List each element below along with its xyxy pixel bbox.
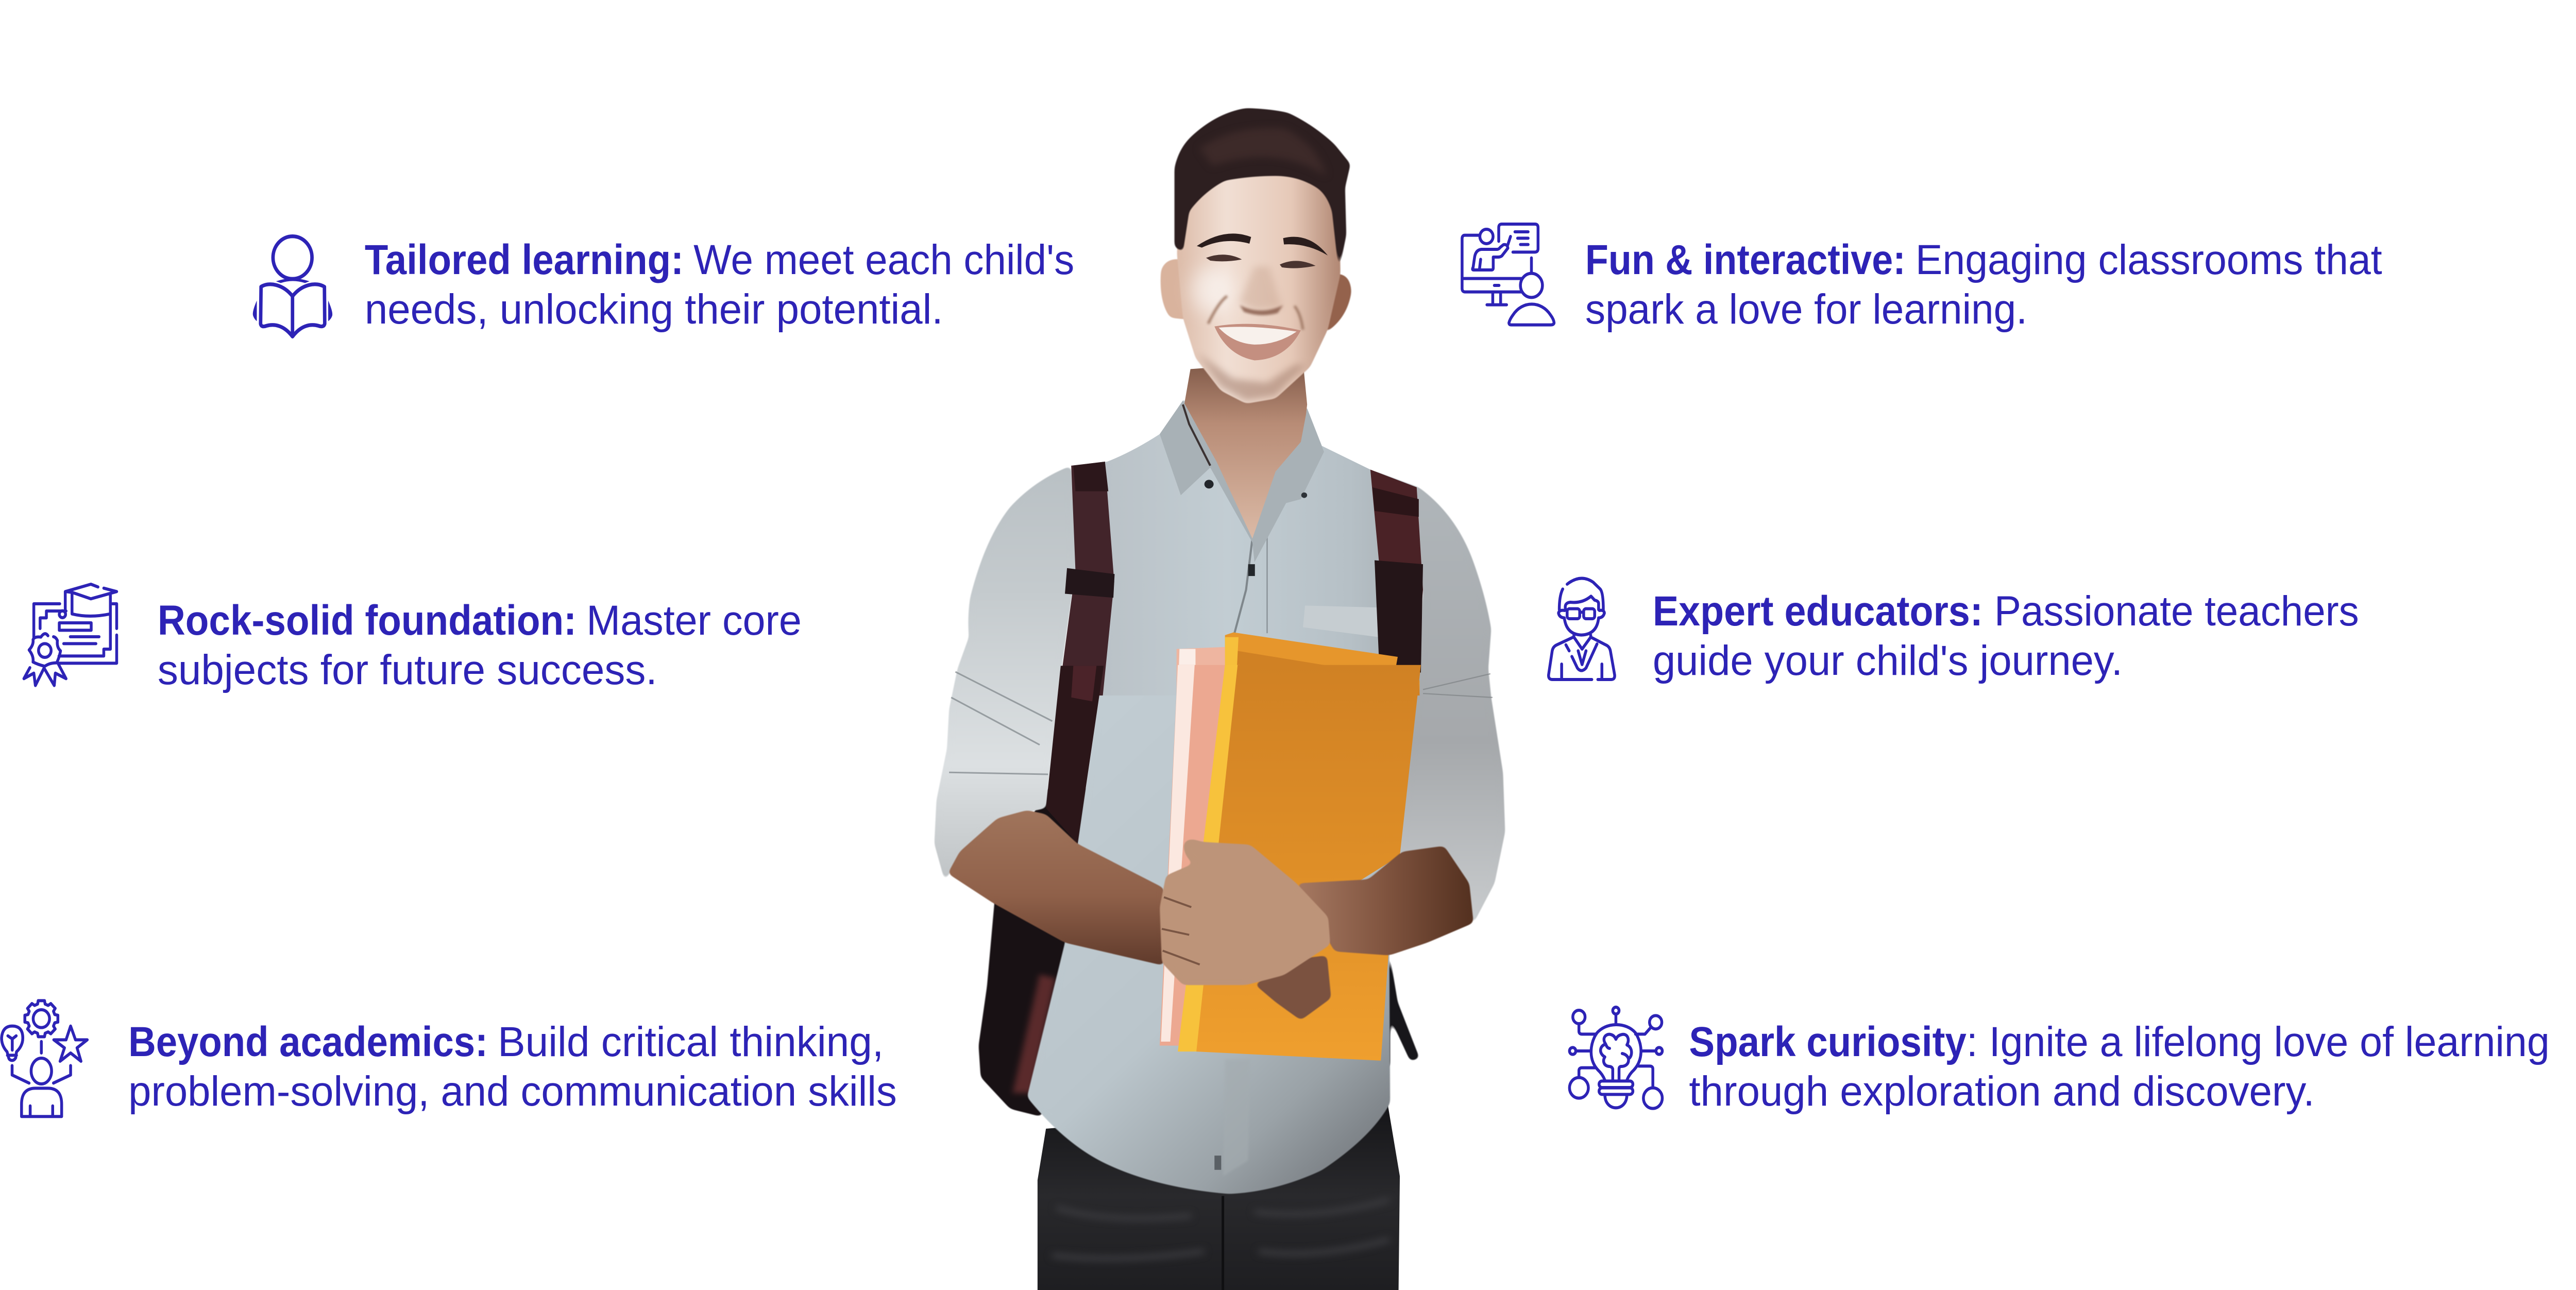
- stack of books: [1160, 665, 1421, 1061]
- text: beyond academics: Build critical thinking,: [498, 1018, 884, 1065]
- text: fun and interactive: spark a love for learning.: [1585, 285, 2027, 333]
- ears: [1161, 259, 1351, 333]
- item: rock-solid foundation: [24, 584, 802, 693]
- text: spark curiosity: through exploration and discovery.: [1689, 1067, 2315, 1115]
- text: beyond academics: problem-solving, and communication skills: [128, 1067, 897, 1115]
- text: tailored learning: We meet each child's: [693, 236, 1074, 283]
- books upper edge: [1177, 633, 1419, 695]
- text: beyond academics: Beyond academics:: [128, 1018, 488, 1065]
- text: spark curiosity: : Ignite a lifelong love of learning: [1967, 1018, 2550, 1065]
- icon: person with bulb, gear and star: [2, 1000, 87, 1116]
- text: fun and interactive: Fun & interactive:: [1585, 236, 1906, 283]
- student photo illustration: [935, 108, 1505, 1290]
- hair: [1175, 108, 1350, 273]
- eyebrows and eyes: [1197, 233, 1328, 268]
- folded fingers: [1255, 955, 1331, 1020]
- left forearm: [948, 810, 1164, 965]
- icon: online teacher on monitor: [1462, 224, 1554, 325]
- item: fun and interactive: [1462, 224, 2382, 333]
- trousers: [1038, 1101, 1400, 1290]
- text: fun and interactive: [1585, 236, 2382, 333]
- backpack: [978, 788, 1419, 1117]
- item: beyond academics: [2, 1000, 897, 1116]
- text: rock-solid foundation: subjects for future success.: [158, 646, 657, 693]
- backpack straps: [1059, 462, 1423, 695]
- neck and collar: [1160, 361, 1324, 576]
- text: tailored learning: [365, 236, 1074, 333]
- left strap lower: [1046, 666, 1104, 844]
- text: rock-solid foundation: [158, 597, 802, 693]
- icon: person reading a book: [253, 236, 332, 336]
- icon: light bulb with brain and nodes: [1569, 1007, 1662, 1109]
- text: rock-solid foundation: Rock-solid foundation:: [158, 597, 577, 644]
- icon: educator with glasses: [1549, 579, 1615, 680]
- text: tailored learning: Tailored learning:: [365, 236, 684, 283]
- text: expert educators: guide your child's journey.: [1653, 637, 2123, 684]
- right forearm: [1297, 846, 1473, 955]
- text: fun and interactive: Engaging classrooms that: [1916, 236, 2382, 283]
- face: [1177, 168, 1341, 404]
- shirt upper and sleeves: [935, 401, 1505, 925]
- text: rock-solid foundation: Master core: [586, 597, 802, 644]
- hand: [1160, 839, 1330, 985]
- item: tailored learning: [253, 236, 1074, 336]
- text: spark curiosity: Spark curiosity: [1689, 1018, 1967, 1065]
- text: tailored learning: needs, unlocking their potential.: [365, 285, 943, 333]
- smile: [1208, 296, 1303, 360]
- text: beyond academics: [128, 1018, 897, 1115]
- text: expert educators: Passionate teachers: [1994, 587, 2359, 635]
- item: spark curiosity: [1569, 1007, 2550, 1115]
- shirt body lower: [1027, 666, 1419, 1194]
- text: spark curiosity: [1689, 1018, 2550, 1115]
- text: expert educators: Expert educators:: [1653, 587, 1983, 635]
- icon: diploma with cap and rosette: [24, 584, 116, 686]
- item: expert educators: [1549, 579, 2359, 684]
- text: expert educators: [1653, 587, 2359, 684]
